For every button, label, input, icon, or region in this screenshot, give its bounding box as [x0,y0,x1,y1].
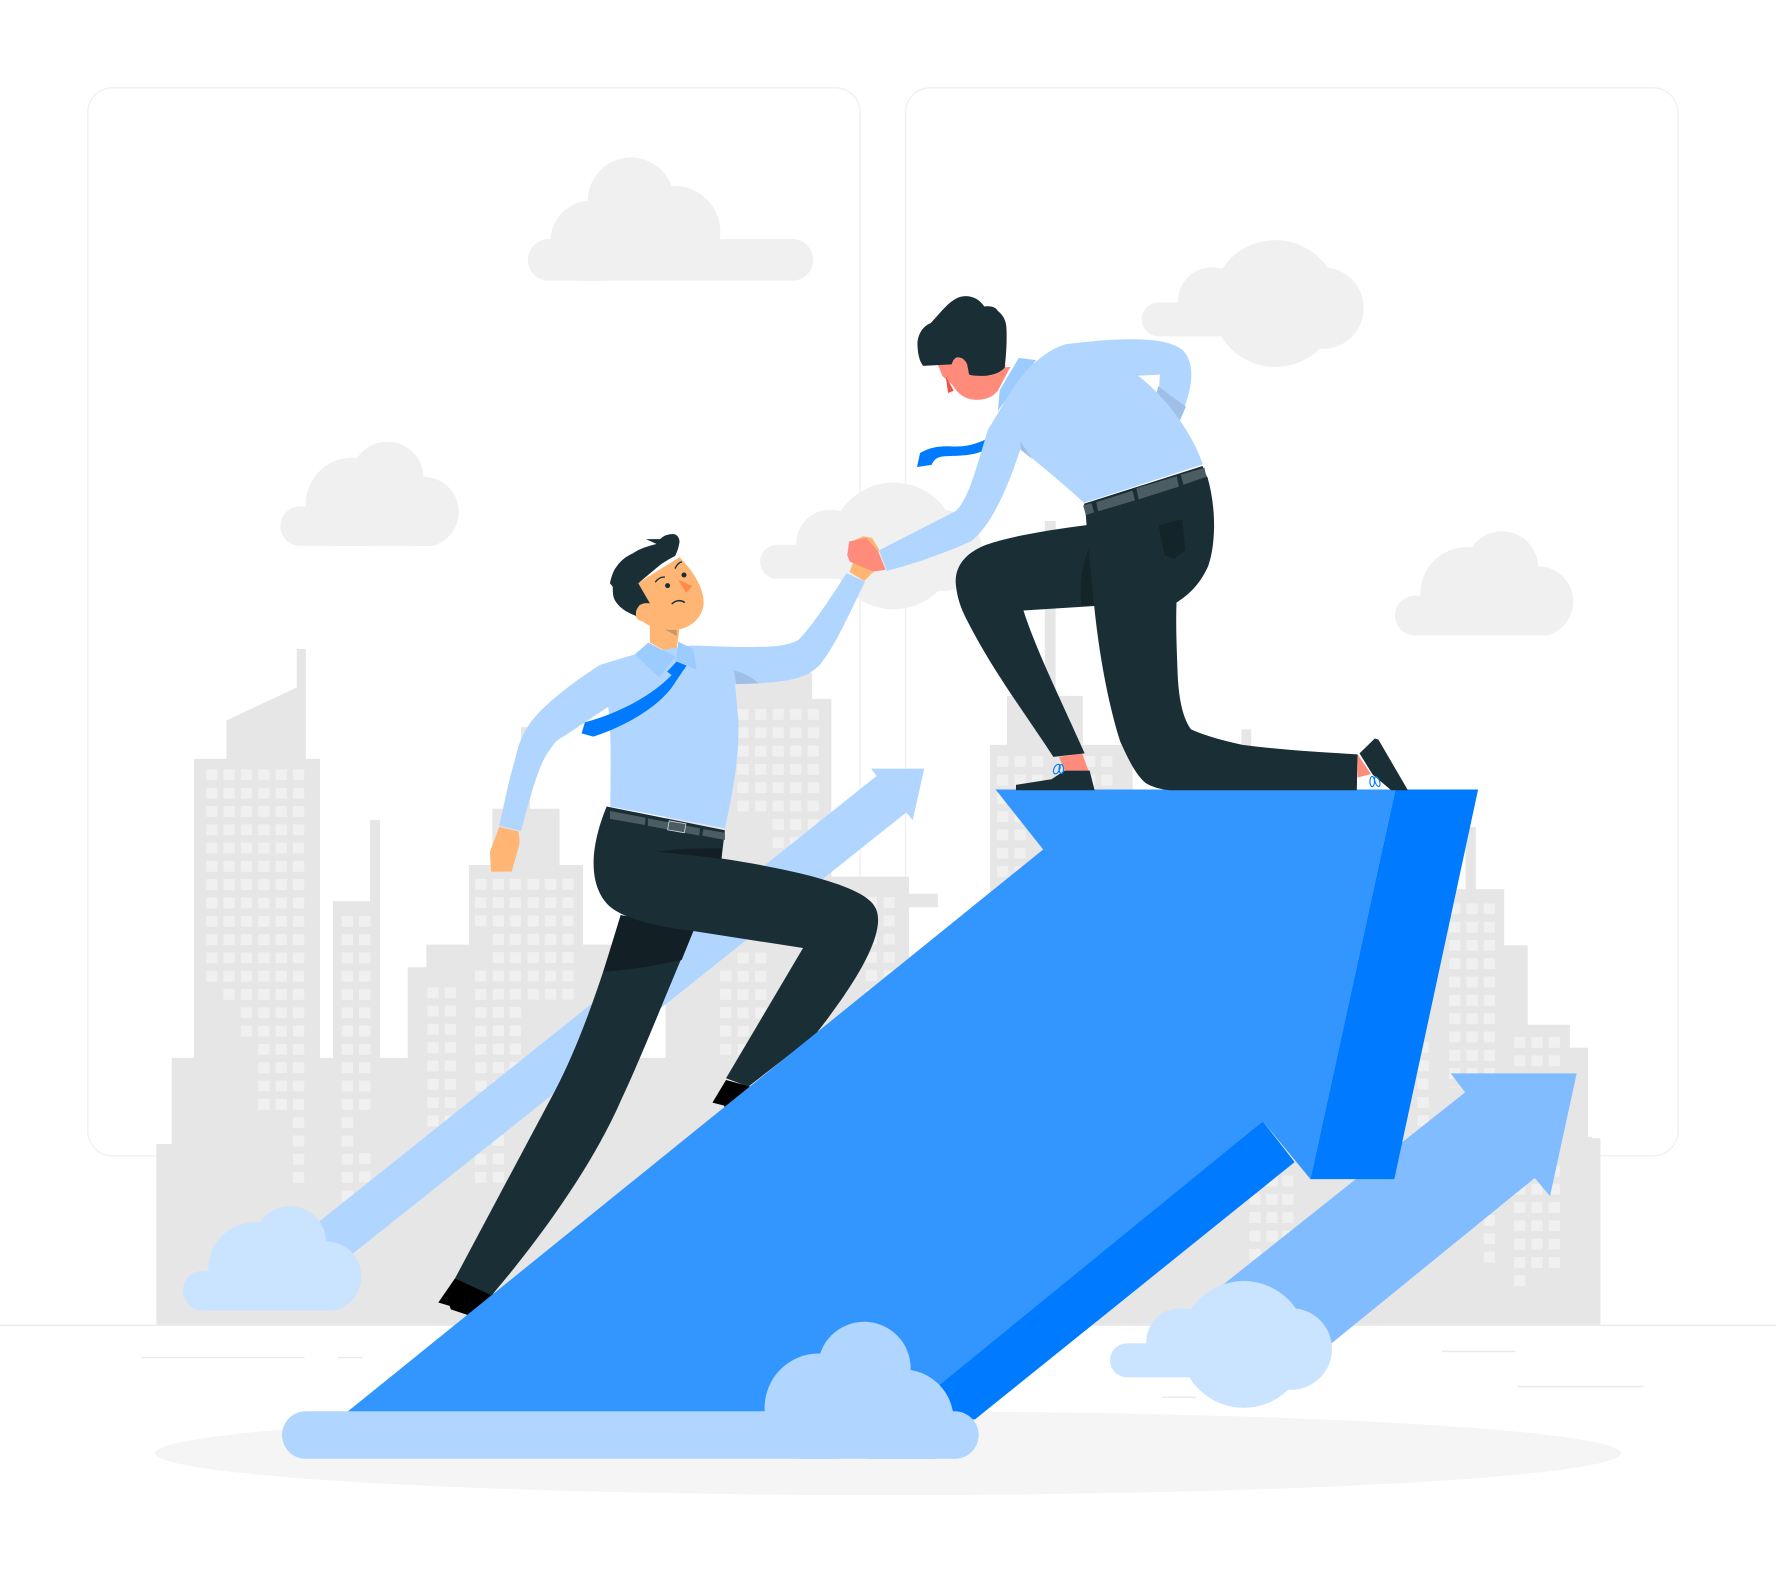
cloud: left [280,442,459,550]
front shoe [712,1080,753,1109]
thigh shadow [1081,548,1094,605]
cloud: top centre [528,157,813,282]
arrow: large main arrow [347,789,1478,1427]
belt [610,811,725,840]
face [637,557,704,630]
arrow: medium rear arrow [1201,1073,1577,1376]
clasping hand [847,538,886,572]
tie [917,439,986,467]
shirt body and arm [879,344,1203,571]
nose [946,376,954,393]
rear foot skin [1358,754,1371,778]
armpit shadow [1021,442,1032,459]
back pocket [1159,519,1185,559]
front foot skin [1059,753,1088,771]
left hand [490,827,519,872]
tie [582,661,687,737]
horizon line [0,1325,1776,1326]
shoelaces [1052,763,1381,787]
front shoe [1016,771,1095,790]
rear leg and hips [1086,477,1358,790]
person: kneeling man helping [847,296,1408,790]
belt [1083,466,1207,516]
neck [985,367,1010,396]
reaching hand [849,536,879,581]
face [938,358,1006,400]
front leg [594,806,878,1087]
shadow behind arm [1090,358,1186,421]
front thigh and shin [956,524,1104,757]
ear [951,358,966,376]
rear leg shadow [603,915,694,972]
person: climbing man [438,534,879,1316]
panel: left background window [88,88,860,1156]
rear leg [455,915,694,1295]
gap between arm and back [1128,375,1160,397]
neck [650,621,679,657]
collar [998,358,1036,411]
cloud: front cloud at base of arrow [282,1322,979,1471]
panel: right background window [906,88,1678,1156]
cloud: lower right over arrow tail [1110,1281,1332,1408]
city skyline [156,521,1600,1325]
rear shoe [1360,738,1408,790]
arm shadow [734,671,758,684]
waist shadow [657,848,722,859]
hair [917,296,1007,376]
arm behind back [1065,339,1191,421]
cloud: lower left over arrow tail [183,1206,361,1315]
ear [635,604,652,621]
hair [610,534,679,616]
cloud: right [1395,531,1573,640]
cloud: behind handshake [760,483,982,609]
shirt [499,573,865,831]
cloud: top right [1142,240,1364,367]
collar [635,642,697,677]
rear shoe [438,1278,498,1316]
arrow: light rear arrow [294,769,924,1273]
building windows [212,709,1554,1293]
ground shadow [155,1411,1621,1495]
facial features [655,562,692,604]
